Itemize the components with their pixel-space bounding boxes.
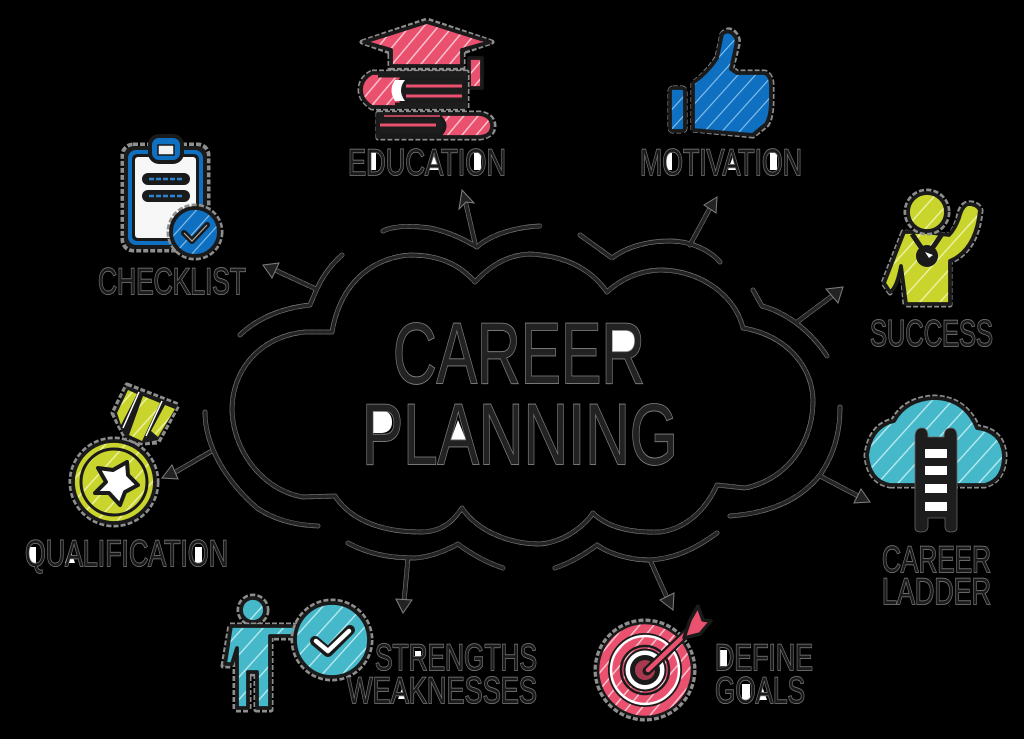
label: strengths weaknesses: WEAKNESSES bbox=[347, 670, 537, 711]
title: career planning: CAREER bbox=[393, 306, 645, 402]
label: checklist: CHECKLIST bbox=[98, 261, 246, 302]
title: career planning: PLANNING bbox=[362, 387, 678, 483]
arrow: to strengths weaknesses bbox=[348, 543, 503, 613]
label: education: EDUCATION bbox=[348, 142, 506, 183]
arrow: to motivation bbox=[580, 197, 720, 262]
arrow: to qualification bbox=[162, 412, 318, 526]
icon: medal with star bbox=[71, 385, 178, 525]
label: career ladder bbox=[882, 539, 991, 612]
panel: career ladder bbox=[866, 397, 1005, 612]
label: qualification: QUALIFICATION bbox=[25, 533, 228, 574]
arrow: to checklist bbox=[240, 255, 342, 335]
panel: checklist bbox=[98, 136, 246, 302]
label: strengths weaknesses bbox=[347, 637, 537, 711]
arrow: to career ladder bbox=[730, 407, 870, 516]
panel: motivation bbox=[640, 30, 802, 183]
label: define goals: GOALS bbox=[715, 670, 805, 711]
panel: success bbox=[870, 191, 993, 354]
arrow: to define goals bbox=[555, 533, 717, 610]
title: career planning bbox=[362, 306, 678, 483]
panel: define goals bbox=[596, 606, 813, 719]
icon: clipboard with check badge bbox=[123, 136, 221, 258]
icon: thumbs up bbox=[670, 30, 772, 136]
arrow: to success bbox=[753, 287, 843, 356]
arrow: to education bbox=[383, 190, 540, 247]
panel: education bbox=[348, 20, 506, 183]
panel: strengths and weaknesses bbox=[223, 596, 537, 711]
icon: cloud with ladder bbox=[866, 397, 1005, 532]
label: motivation: MOTIVATION bbox=[640, 142, 802, 183]
label: define goals bbox=[715, 637, 813, 711]
panel: qualification bbox=[25, 385, 228, 574]
label: strengths weaknesses: STRENGTHS bbox=[375, 637, 537, 678]
icon: person pointing at check circle bbox=[223, 596, 371, 710]
central cloud bbox=[232, 254, 813, 544]
icon: target with arrow bbox=[596, 606, 711, 719]
icon: graduation cap and books bbox=[360, 20, 494, 138]
icon: person with medal bbox=[883, 191, 981, 305]
label: define goals: DEFINE bbox=[715, 637, 813, 678]
